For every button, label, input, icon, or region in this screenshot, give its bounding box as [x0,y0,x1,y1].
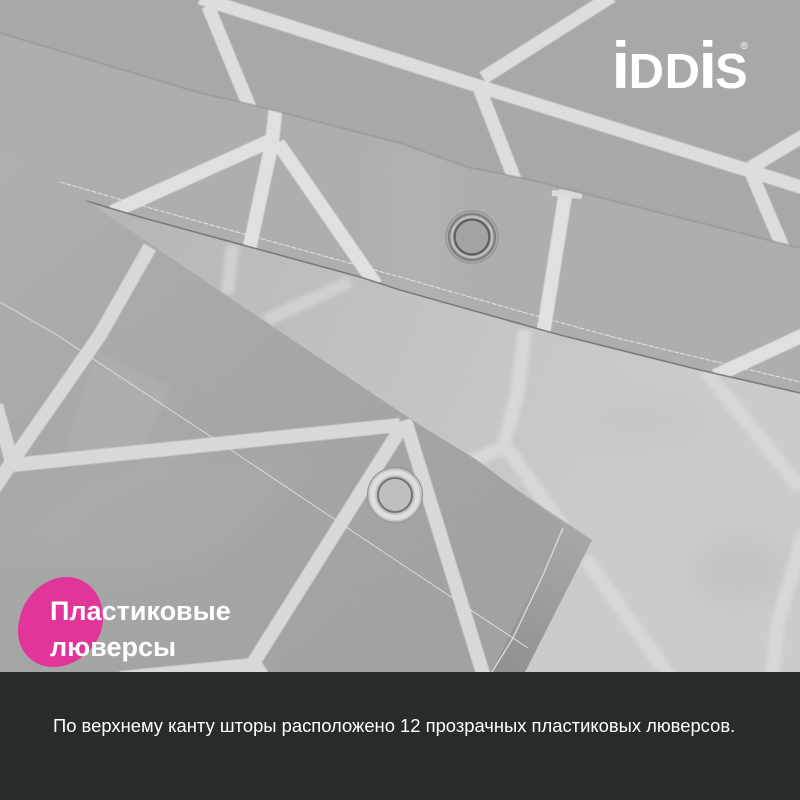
heading: люверсы [50,632,176,662]
fabric grain [91,202,792,512]
logo: S [715,45,748,99]
hem fold shadow and stitching [0,33,800,393]
logo: i [612,28,630,102]
logo: ® [740,41,748,52]
clear plastic eyelet, lower [367,467,423,523]
heading [50,596,231,662]
caption: По верхнему канту шторы расположено 12 прозрачных пластиковых люверсов. [53,715,735,736]
translucent curtain layer [90,203,800,672]
front panel [0,182,592,672]
bottom dark band [0,672,800,800]
hem band [108,102,800,376]
logo: D [665,45,700,99]
pink accent blob [18,577,103,667]
logo [612,28,748,102]
logo: D [629,45,664,99]
metallic-looking eyelet, upper [446,211,498,263]
heading: Пластиковые [50,596,231,626]
logo: i [699,28,717,102]
